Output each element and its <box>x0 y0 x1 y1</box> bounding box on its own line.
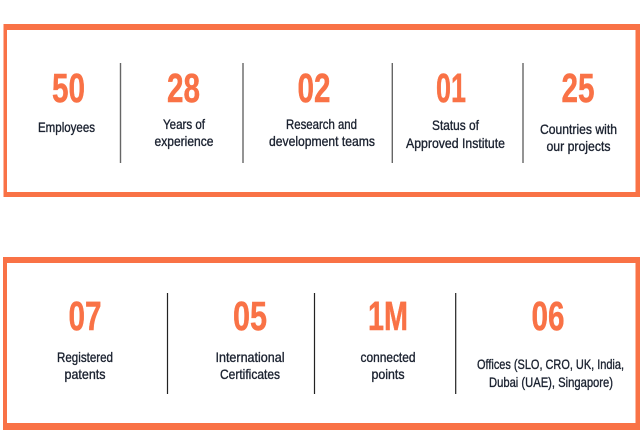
stat: 05 international certificates: Certificates <box>220 366 280 382</box>
stat: 25 countries with our projects <box>540 65 617 154</box>
stat: 02 research and development teams: development teams <box>269 133 375 149</box>
panel border: top <box>4 24 640 197</box>
stat: 1M connected points: 1M <box>368 293 408 339</box>
stat: 50 employees: 50 <box>52 65 85 111</box>
stat: 02 research and development teams <box>269 65 375 149</box>
stat: 28 years of experience: 28 <box>167 65 200 111</box>
stat: 06 offices: 06 <box>532 293 564 339</box>
stat: 02 research and development teams: 02 <box>298 65 330 111</box>
stat: 07 registered patents <box>57 293 113 382</box>
stat: 07 registered patents: Registered <box>57 349 113 365</box>
stat: 06 offices <box>477 293 624 390</box>
stat: 01 status of approved institute: Approved Institute <box>406 135 505 151</box>
stat: 28 years of experience: experience <box>154 133 214 149</box>
panel: top statistics <box>4 24 640 197</box>
stat: 1M connected points <box>360 293 416 382</box>
stat: 01 status of approved institute <box>406 65 505 151</box>
stat: 06 offices: Dubai (UAE), Singapore) <box>489 374 613 390</box>
panel border: bottom <box>3 257 640 430</box>
stat: 28 years of experience <box>154 65 214 149</box>
stat: 05 international certificates: International <box>216 349 284 365</box>
stat: 25 countries with our projects: Countries with <box>540 121 617 137</box>
stat: 25 countries with our projects: our projects <box>546 138 610 154</box>
stat: 1M connected points: connected <box>360 349 416 365</box>
stat: 05 international certificates: 05 <box>233 293 267 339</box>
stat: 07 registered patents: 07 <box>68 293 102 339</box>
stat: 28 years of experience: Years of <box>163 116 205 132</box>
stat: 02 research and development teams: Research and <box>286 116 357 132</box>
stat: 01 status of approved institute: Status of <box>432 117 479 133</box>
stat: 50 employees: Employees <box>38 119 95 135</box>
stat: 05 international certificates <box>216 293 284 382</box>
panel: bottom statistics <box>3 257 640 430</box>
stat: 01 status of approved institute: 01 <box>436 65 466 111</box>
stat: 25 countries with our projects: 25 <box>562 65 594 111</box>
stat: 1M connected points: points <box>372 366 404 382</box>
stat: 50 employees <box>38 65 95 135</box>
stat: 07 registered patents: patents <box>64 366 106 382</box>
